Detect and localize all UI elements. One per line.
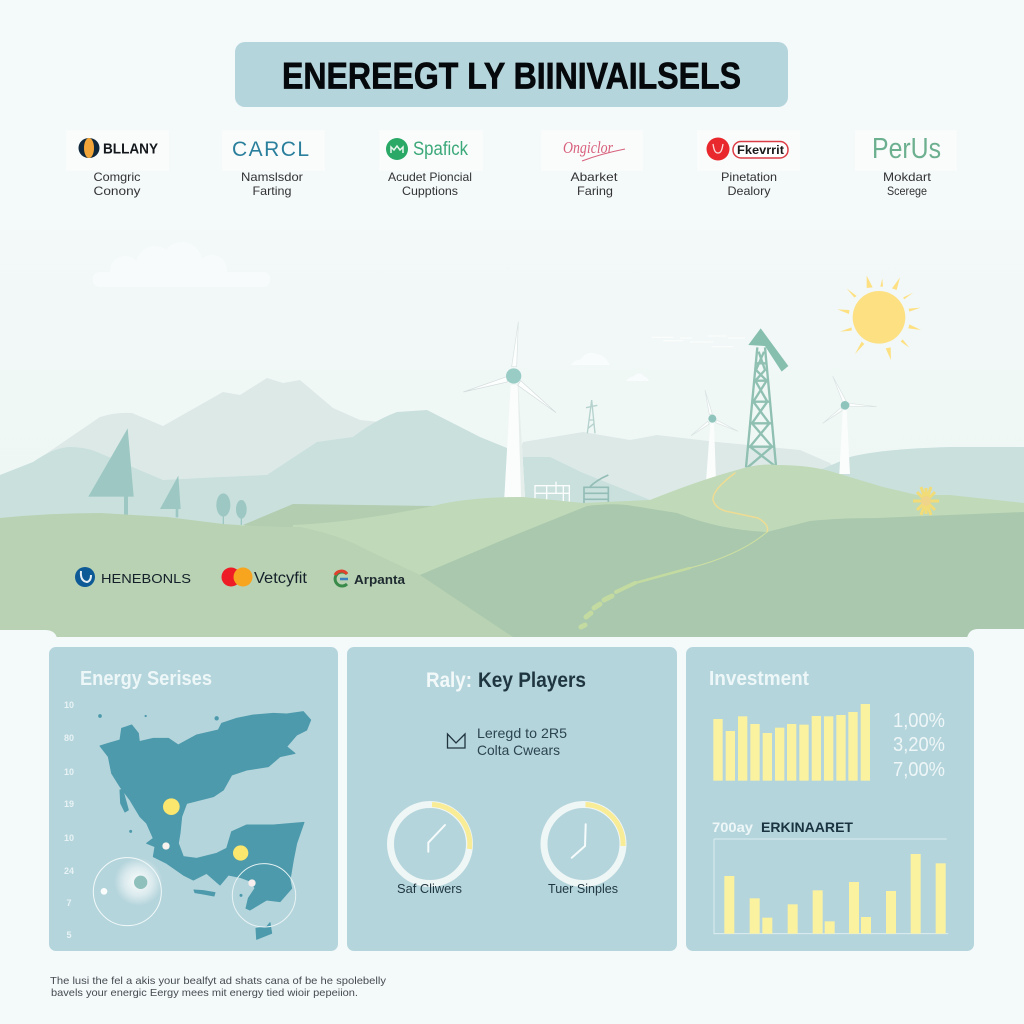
- small clouds: [571, 336, 745, 381]
- gauge 1: [390, 804, 470, 896]
- axis labels: 10: [64, 700, 74, 710]
- axis labels: 5: [66, 930, 72, 940]
- company logo: Spafick: Acudet Pioncial: [388, 170, 472, 184]
- chart heading: ERKINAARET: [761, 819, 853, 835]
- panel: energy series map: [49, 647, 338, 951]
- trees: [88, 428, 247, 525]
- wind turbines, pylon, sun (upper scene): [463, 276, 921, 504]
- title banner: ENEREEGT LY BIINIVAILSELS: [282, 56, 741, 96]
- company logo: signature: Ongiclor: [563, 138, 613, 157]
- company logo: Spafick: Spafick: [413, 139, 468, 160]
- percentage labels: 7,00%: [893, 759, 945, 781]
- footer text: [50, 975, 387, 999]
- company logo: PerUs: Scerege: [887, 184, 927, 198]
- company logo: Fkevrrit: Fkevrrit: [737, 143, 784, 157]
- axis labels: 10: [64, 767, 74, 777]
- company logo: Bllany: Comgric: [94, 170, 140, 184]
- bar chart: lower: [714, 839, 948, 934]
- distant pylon: [586, 400, 597, 433]
- bar chart: upper: [713, 704, 870, 781]
- company logo: Spafick: Cupptions: [402, 184, 458, 198]
- panel heading: [426, 669, 586, 692]
- partner logo: Arpanta: Arpanta: [354, 572, 406, 587]
- partner logo: Arpanta: [335, 571, 406, 587]
- axis labels: 10: [64, 833, 74, 843]
- company logo: Fkevrrit: [697, 130, 800, 198]
- partner logo: Henebonls: HENEBONLS: [101, 571, 191, 586]
- axis labels: 24: [64, 866, 74, 876]
- cloud: large: [93, 242, 270, 287]
- company logo: signature: Abarket: [570, 170, 618, 184]
- company logo: Bllany: [66, 130, 169, 198]
- axis labels: 80: [64, 733, 74, 743]
- panel: investment: [686, 647, 974, 951]
- winding path: [581, 473, 768, 627]
- chart heading: [712, 819, 853, 835]
- company logo: Carcl: [222, 130, 325, 198]
- company logo: signature: Faring: [577, 184, 613, 198]
- company logo: PerUs: Mokdart: [883, 170, 932, 184]
- icon: envelope: [448, 734, 465, 748]
- company logo: Bllany: Conony: [94, 184, 140, 198]
- company logo: Fkevrrit: Pinetation: [721, 170, 777, 184]
- company logo: Carcl: Farting: [252, 184, 292, 198]
- company logo: signature: [541, 130, 643, 198]
- partner logo: Henebonls: [75, 567, 191, 587]
- bottom band: [0, 629, 1024, 1024]
- title banner: [235, 42, 788, 107]
- company logo: PerUs: [855, 130, 957, 198]
- chart heading: 700ay: [712, 819, 753, 835]
- note text: [477, 725, 567, 758]
- company logo: Carcl: CARCL: [232, 138, 309, 161]
- mountains: [0, 378, 1024, 525]
- gauge 2: [544, 804, 623, 896]
- percentage labels: 3,20%: [893, 734, 945, 756]
- partner logo: Vetcyfit: [222, 568, 308, 587]
- axis labels: [64, 700, 74, 940]
- percentage labels: [893, 710, 945, 781]
- company logo: Carcl: Namslsdor: [241, 170, 303, 184]
- panel title: Energy Serises: [80, 668, 212, 690]
- turbine small 1: [691, 390, 738, 481]
- icon: sun: [837, 276, 921, 360]
- company logo: PerUs: PerUs: [872, 133, 941, 165]
- gauge 2: Tuer Sinples: [548, 881, 618, 896]
- sky: [0, 200, 1024, 500]
- panel: key players: [347, 647, 677, 951]
- note text: Colta Cwears: [477, 742, 560, 758]
- company logo: Bllany: BLLANY: [103, 140, 158, 158]
- footer text: bavels your energic Eergy mees mit energy tied wioir pepeiion.: [51, 987, 358, 999]
- gauge 1: Saf Cliwers: [397, 881, 462, 896]
- panel heading: Raly:: [426, 669, 472, 692]
- turbine large: [463, 322, 556, 497]
- company logo: Spafick: [379, 130, 483, 198]
- note text: Leregd to 2R5: [477, 725, 567, 741]
- turbine small 2: [823, 376, 877, 474]
- hotspot markers: [162, 798, 256, 887]
- partner logo: Vetcyfit: Vetcyfit: [254, 570, 308, 587]
- lattice tower: [746, 328, 788, 467]
- company logo: Fkevrrit: Dealory: [728, 184, 770, 198]
- icon: small sun on hill: [913, 487, 939, 515]
- footer text: The lusi the fel a akis your bealfyt ad shats cana of be he spolebelly: [50, 975, 387, 987]
- axis labels: 7: [66, 898, 72, 908]
- panel title: Investment: [709, 668, 809, 690]
- panel heading: Key Players: [478, 669, 586, 692]
- map: [93, 712, 311, 939]
- axis labels: 19: [64, 799, 74, 809]
- small buildings: [535, 475, 608, 504]
- percentage labels: 1,00%: [893, 710, 945, 732]
- hills: [0, 465, 1024, 640]
- zoom circles: [93, 858, 296, 927]
